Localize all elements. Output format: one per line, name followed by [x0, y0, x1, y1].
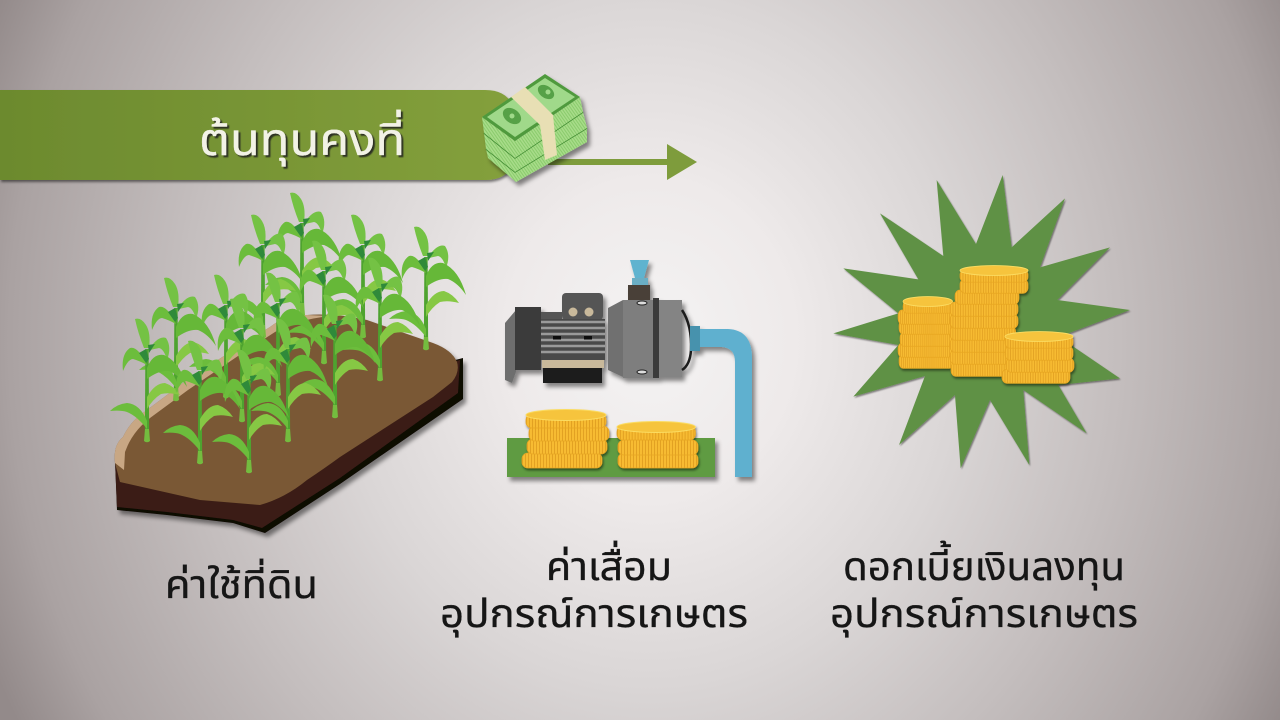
title: ต้นทุนคงที่ — [199, 109, 405, 167]
label: interest on investment — [830, 540, 1138, 637]
label: equipment depreciation: ค่าเสื่อม — [546, 540, 672, 589]
icon: soil plot — [115, 315, 463, 533]
arrow — [548, 144, 697, 180]
pipe — [690, 326, 752, 477]
banner: fixed costs — [0, 90, 515, 180]
icon: corn plants — [110, 193, 466, 473]
panel: equipment depreciation — [440, 260, 752, 637]
label: equipment depreciation — [440, 540, 748, 637]
label: interest on investment: อุปกรณ์การเกษตร — [830, 593, 1138, 637]
icon: coin stacks — [898, 266, 1074, 383]
banner bar — [0, 90, 515, 180]
label: land rent: ค่าใช้ที่ดิน — [165, 558, 318, 607]
panel: interest on investment — [830, 175, 1138, 637]
panel: land rent — [110, 193, 466, 607]
icon: green starburst — [833, 175, 1130, 468]
label: interest on investment: ดอกเบี้ยเงินลงทุน — [843, 540, 1125, 590]
label: equipment depreciation: อุปกรณ์การเกษตร — [440, 593, 748, 637]
icon: money stack — [482, 74, 587, 182]
icon: water pump — [505, 260, 752, 477]
icon: plate with coins — [507, 410, 715, 477]
